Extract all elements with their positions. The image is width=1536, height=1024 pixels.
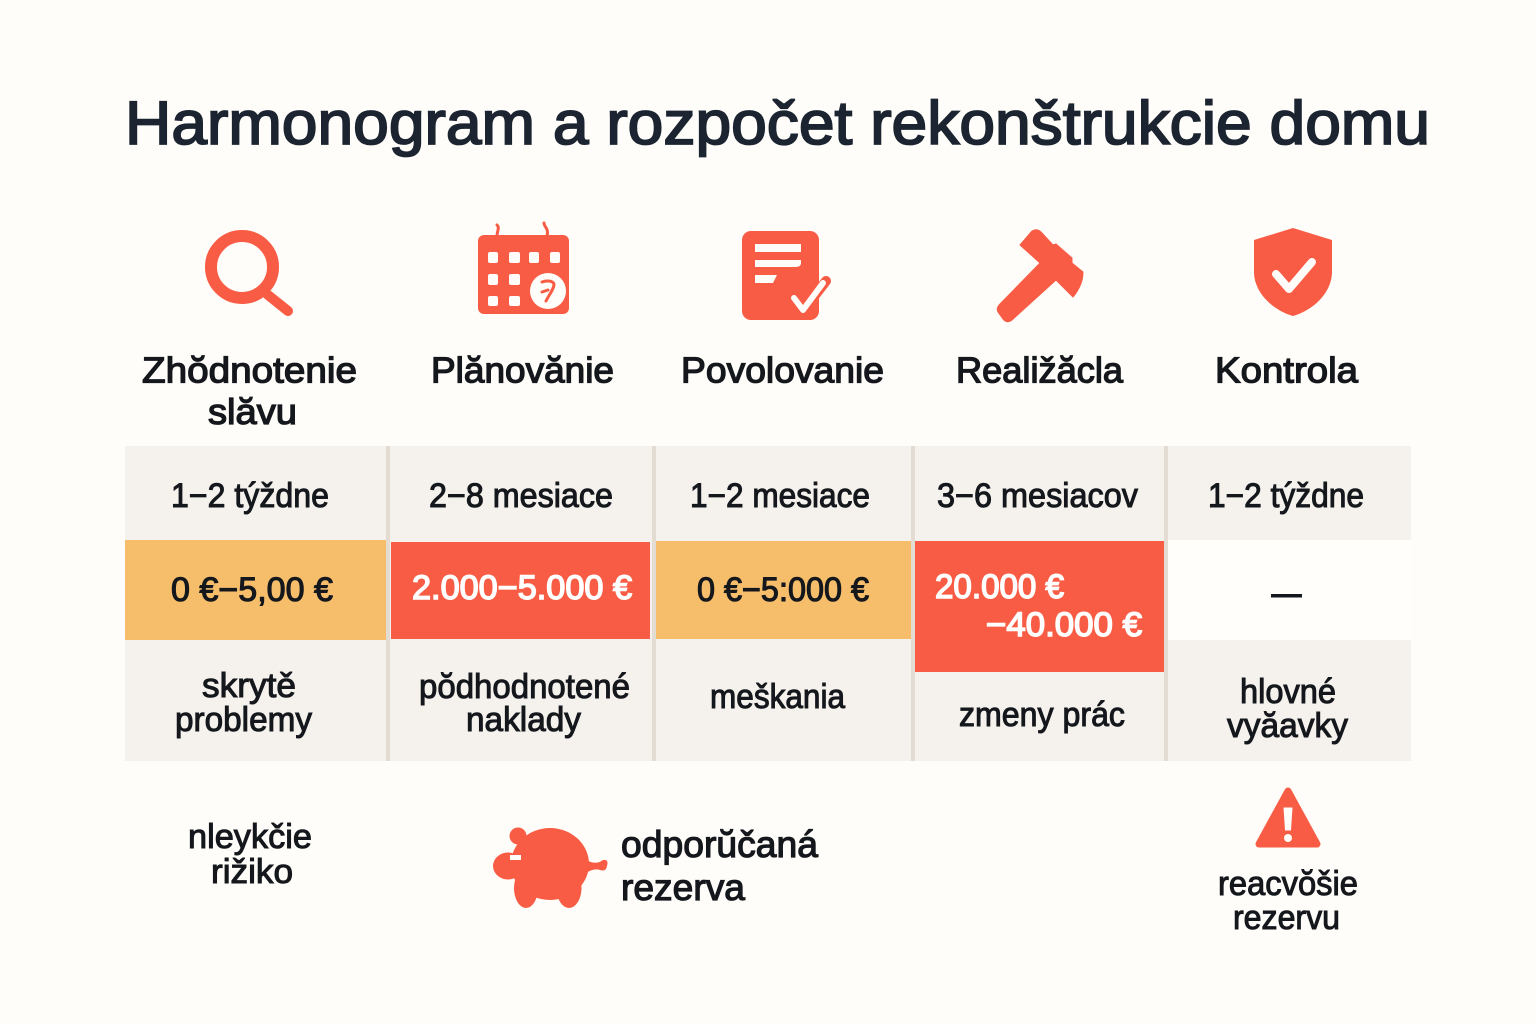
text: lowest risk note: nleykčie — [188, 818, 312, 856]
icon: shield with check — [1254, 228, 1332, 316]
cell: cost 20000–40000: 20.000 € — [935, 568, 1064, 606]
row: durations: 1−2 týždne — [1208, 477, 1364, 515]
row: risks: hlovné — [1240, 673, 1336, 711]
icon: magnifying glass — [211, 236, 288, 311]
column: Zhodnotenie stavu header — [142, 236, 357, 432]
icon: hammer — [997, 230, 1083, 322]
row: durations: 1−2 týždne — [171, 477, 329, 515]
panel: table — [125, 446, 1411, 761]
column: Planovanie header — [431, 223, 614, 390]
column: Realizacia header — [956, 230, 1124, 390]
cell: cost 2000–5000 — [391, 542, 650, 639]
row: durations: 3−6 mesiacov — [937, 477, 1138, 515]
row: durations: 2−8 mesiace — [429, 477, 613, 515]
row: risks: zmeny prác — [959, 696, 1125, 734]
icon: warning triangle — [1259, 791, 1317, 844]
text: lowest risk note — [188, 818, 312, 891]
callout: activate reserve warning — [1218, 791, 1358, 937]
cell: cost 0–500 — [125, 540, 386, 640]
text: recommended reserve: odporŭčaná — [621, 824, 818, 865]
row: risks: naklady — [466, 701, 581, 739]
cell: cost 20000–40000: −40.000 € — [986, 606, 1142, 644]
column: Povolovanie header — [681, 231, 884, 390]
text: recommended reserve: rezerva — [621, 867, 745, 908]
heading: Zhodnotenie stavu: Zhŏdnotenie — [142, 350, 357, 390]
row: risks: problemy — [175, 701, 312, 739]
text: lowest risk note: rižiko — [211, 853, 293, 891]
text: activate reserve — [1218, 865, 1358, 937]
heading: Realizacia: Realižăcla — [956, 350, 1124, 390]
heading: Kontrola: Kontrola — [1215, 350, 1359, 390]
row: risks: vyăavky — [1227, 707, 1348, 745]
title: Harmonogram a rozpočet rekonštrukcie domu — [125, 89, 1430, 157]
icon: document with check — [742, 231, 826, 320]
callout: recommended reserve — [493, 824, 818, 908]
cell: cost 0–500: 0 €−5,00 € — [171, 571, 333, 609]
icon: piggy bank — [493, 828, 608, 908]
row: durations — [171, 477, 1364, 515]
cell: cost 20000–40000 — [915, 541, 1164, 672]
cell: cost 0–5000: 0 €−5:000 € — [697, 571, 869, 609]
row: durations: 1−2 mesiace — [690, 477, 870, 515]
row: risks: skrytě — [202, 667, 296, 705]
cell: cost 2000–5000: 2.000−5.000 € — [412, 569, 632, 607]
cell: no cost — [1168, 540, 1411, 640]
cell: cost 0–5000 — [656, 541, 911, 639]
text: recommended reserve — [621, 824, 818, 908]
heading: Zhodnotenie stavu: slăvu — [208, 391, 297, 432]
heading: Povolovanie: Povolovanie — [681, 350, 884, 390]
text: activate reserve: rezervu — [1233, 899, 1340, 937]
row: risks: meškania — [710, 678, 845, 716]
column: Kontrola header — [1215, 228, 1359, 390]
row: risks — [175, 667, 1348, 745]
row: risks: pŏdhodnotené — [419, 668, 630, 706]
heading: Planovanie: Plănovănie — [431, 350, 614, 390]
icon: calendar — [478, 223, 569, 314]
text: activate reserve: reacvŏšie — [1218, 865, 1358, 903]
heading: Zhodnotenie stavu — [142, 350, 357, 432]
